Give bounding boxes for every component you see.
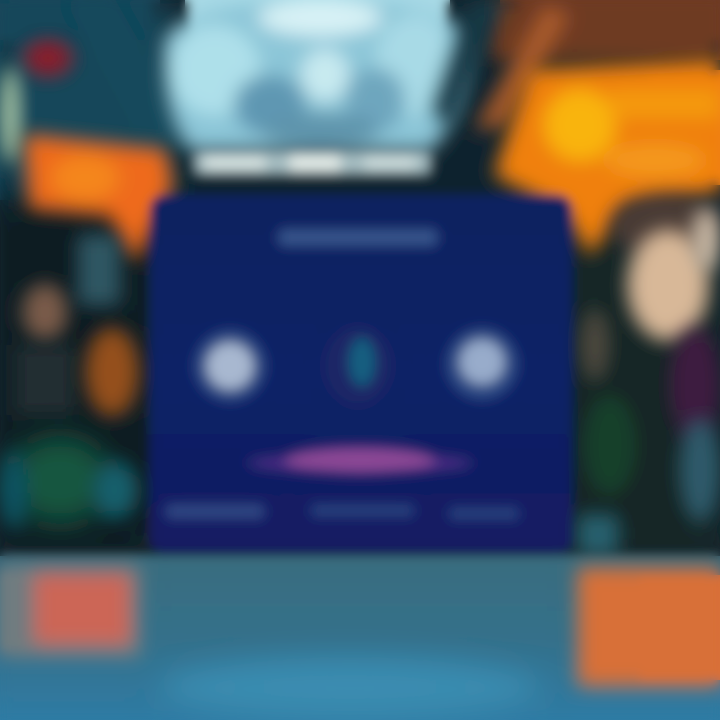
blue-grey lower right <box>680 418 720 522</box>
red accent top left <box>24 40 72 76</box>
cloud <box>164 0 470 150</box>
orange speech bubble left <box>25 135 172 262</box>
orange block right edge fill <box>640 576 720 680</box>
teal foliage left <box>93 462 137 518</box>
teal lower edge right <box>578 515 618 555</box>
figure right face <box>628 230 708 340</box>
panel title <box>278 229 438 246</box>
light title strip under cloud <box>195 152 430 174</box>
orange speech bubble right <box>495 60 720 255</box>
figure right pale edge <box>692 208 720 272</box>
figure left head <box>23 284 67 340</box>
figures right side <box>578 193 720 555</box>
caption left <box>165 504 265 519</box>
blue-grey shape behind jar <box>78 235 120 305</box>
grey block left edge <box>0 572 30 650</box>
green foliage right <box>584 395 636 495</box>
panel <box>150 195 572 553</box>
floor glow <box>160 658 540 718</box>
panel background <box>150 195 572 553</box>
orange bubble right edge fill <box>650 75 720 180</box>
icon: left circle <box>194 330 266 402</box>
icon: right circle <box>446 328 518 400</box>
diagonal dark streak left of cloud <box>70 0 190 150</box>
caption centre <box>310 504 415 517</box>
floor <box>0 556 720 720</box>
orange streak top right <box>475 5 570 130</box>
cloud top fill <box>190 0 445 40</box>
pink arc highlight <box>248 447 472 473</box>
figure right dark hair <box>610 193 720 257</box>
orange block right <box>578 568 720 686</box>
icon: centre circle <box>324 326 392 406</box>
salmon block left <box>0 565 140 657</box>
orange jar <box>86 328 138 416</box>
teal foliage far left <box>0 452 28 528</box>
figure right shoulder <box>581 309 609 381</box>
caption right <box>448 507 520 520</box>
figures left side <box>0 235 138 528</box>
pale accent left edge <box>0 67 20 163</box>
figure right purple clothing <box>670 327 720 443</box>
figure left body <box>15 345 75 415</box>
green foliage left <box>8 436 112 524</box>
dark streak right of cloud <box>432 0 505 130</box>
